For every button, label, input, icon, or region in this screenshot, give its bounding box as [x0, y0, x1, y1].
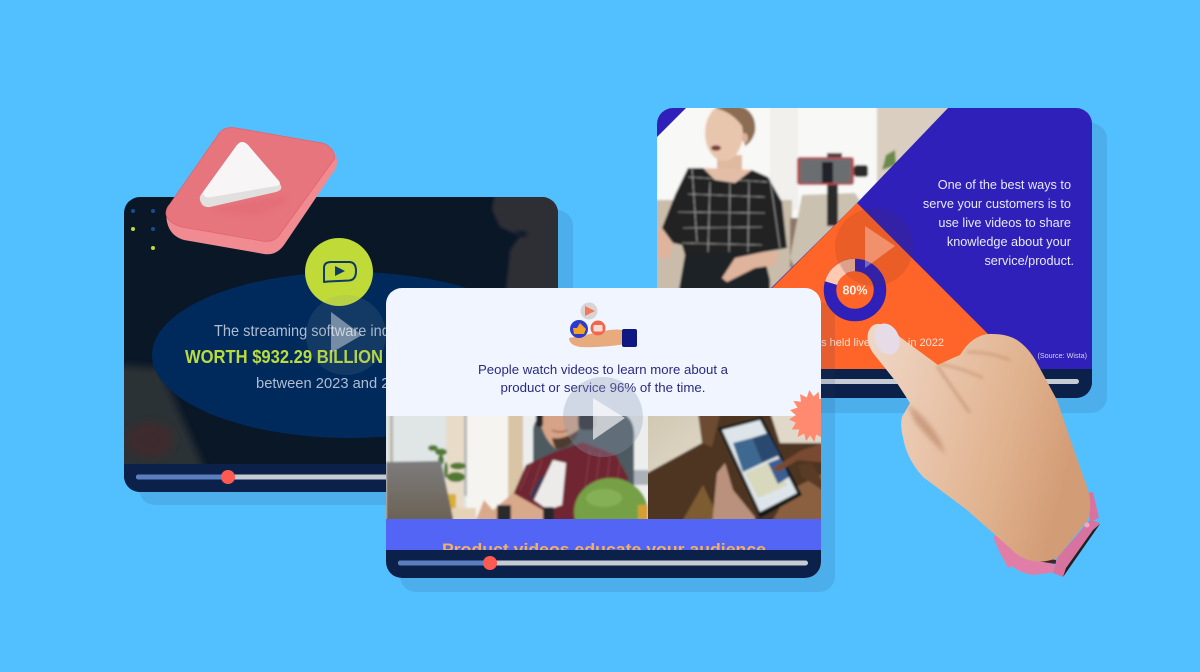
blue corner triangle	[657, 108, 686, 137]
panel: product video card	[376, 288, 833, 578]
photo: hand on smartphone	[648, 416, 821, 519]
watch screen	[1063, 524, 1100, 577]
heading: streaming software text: between 2023 and 2030	[256, 375, 414, 392]
panel: streaming software video card	[118, 190, 565, 492]
source note: (Source: Wista)	[1037, 351, 1087, 360]
lower wrist strap	[993, 535, 1056, 575]
blue card background	[657, 108, 1092, 398]
triangle top face	[203, 142, 280, 197]
text: live video advice: serve your customers is to	[923, 197, 1071, 211]
icon: 3D pointing hand with smartwatch	[868, 320, 1100, 577]
tile soft shadow	[212, 195, 288, 216]
text: live video advice	[923, 178, 1074, 268]
icon: play overlay	[306, 295, 386, 375]
text: live video advice: service/product.	[984, 254, 1074, 268]
text: live video advice: knowledge about your	[947, 235, 1072, 249]
heading: product videos: Product videos educate your audience	[442, 540, 766, 559]
hand shape	[868, 324, 1090, 562]
panel: live video card	[650, 100, 1092, 400]
heading: streaming software text	[185, 324, 386, 388]
text: people watch videos	[478, 362, 729, 395]
icon: hand holding social icons	[569, 302, 637, 347]
card light background	[386, 288, 821, 578]
text: people watch videos: People watch videos to learn more about a	[478, 362, 729, 377]
icon: play overlay	[563, 377, 643, 457]
video control bar	[124, 464, 386, 492]
icon: 3D red play tile	[166, 128, 337, 254]
text: live video advice: use live videos to share	[938, 216, 1071, 230]
orange triangle	[772, 203, 988, 369]
heading: streaming software text: WORTH $932.29 BILLION by 2030,	[185, 346, 453, 367]
left card shadow	[139, 210, 573, 505]
white play triangle	[200, 142, 281, 207]
watch body	[1053, 520, 1100, 577]
blue banner	[386, 519, 821, 550]
heading: streaming software text: The streaming software industry is	[214, 323, 436, 340]
photo: man with game controller	[386, 416, 648, 519]
fingernail	[870, 320, 904, 358]
blurred background photo	[118, 190, 565, 470]
donut chart 80%	[830, 265, 880, 315]
video control bar	[821, 369, 1092, 398]
caption: live video stat: Marketers held live videos in 2022	[778, 337, 944, 349]
text: live video advice: One of the best ways to	[938, 178, 1071, 192]
card dark background	[124, 197, 558, 492]
video control bar	[386, 550, 821, 578]
tile side	[166, 128, 337, 254]
icon: play overlay	[835, 208, 913, 286]
centre card shadow	[400, 302, 835, 592]
icon: lime video badge	[305, 238, 373, 306]
right card shadow	[672, 123, 1107, 413]
blue ellipse	[152, 272, 466, 438]
woman filming photo	[657, 108, 948, 288]
dark strap inner	[1008, 546, 1056, 564]
tile top face	[166, 128, 335, 241]
thumb crease	[908, 405, 946, 455]
starburst badge	[789, 390, 821, 442]
donut chart 80%: 80%	[842, 284, 868, 298]
upper wrist strap	[1088, 492, 1099, 522]
knuckle creases	[937, 352, 1010, 413]
decorative dots	[131, 209, 155, 250]
text: people watch videos: product or service 96% of the time.	[500, 380, 706, 395]
